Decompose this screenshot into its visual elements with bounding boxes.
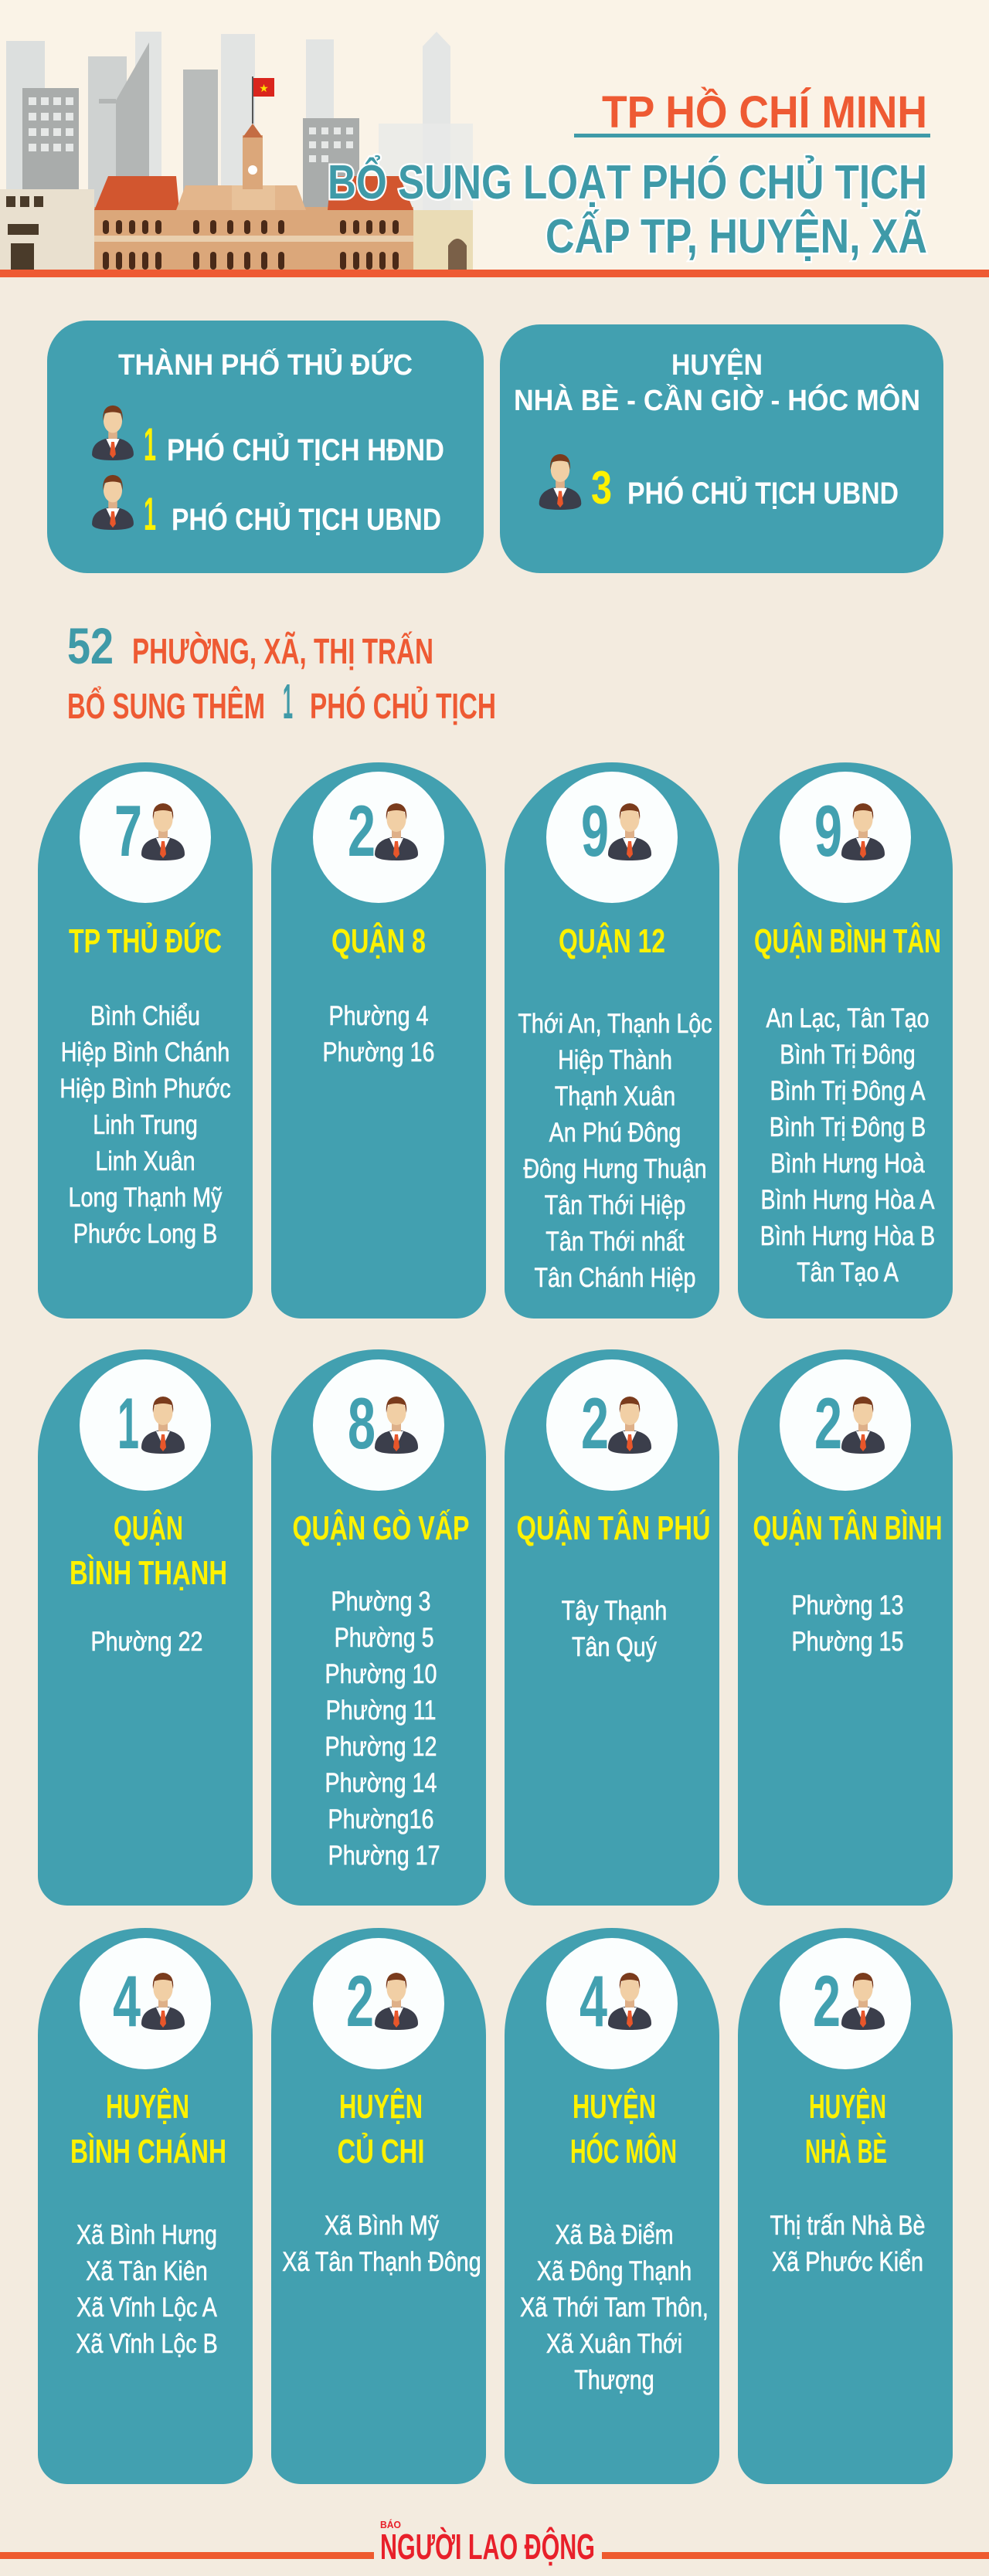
card: Quận Bình Thạnh [38,1349,253,1906]
title: TP HỒ CHÍ MINH [602,87,927,137]
card: Huyện Hóc Môn: Xã Xuân Thới [546,2328,682,2359]
card: Huyện Hóc Môn: 4 [579,1960,607,2041]
panel: Thành phố Thủ Đức: PHÓ CHỦ TỊCH HĐND [167,432,444,467]
card: Huyện Củ Chi: Xã Bình Mỹ [325,2210,439,2241]
cityscape illustration [0,32,473,270]
card: Huyện Bình Chánh: Xã Vĩnh Lộc B [76,2328,218,2359]
card: Quận Bình Tân: Bình Trị Đông A [770,1075,926,1106]
card: Quận Tân Phú [505,1349,719,1906]
subheading: 52 phường, xã, thị trấn: 1 [283,674,293,729]
card: Huyện Nhà Bè: 2 [813,1960,841,2041]
card: Quận Bình Tân: Bình Trị Đông [780,1039,916,1070]
panel: Thành phố Thủ Đức: 1 [144,488,156,540]
card: TP Thủ Đức: TP THỦ ĐỨC [69,921,222,960]
card: TP Thủ Đức: Bình Chiểu [90,1000,200,1031]
cityscape illustration: ★ [259,83,269,95]
subheading: 52 phường, xã, thị trấn: PHƯỜNG, XÃ, THỊ TRẤN [132,631,433,671]
footer logo: Báo Người Lao Động [0,2519,989,2567]
card: Quận Bình Tân: Bình Hưng Hoà [770,1148,925,1179]
card: Huyện Hóc Môn: Xã Đông Thạnh [537,2255,692,2286]
card: TP Thủ Đức: 7 [114,790,142,871]
card: Huyện Nhà Bè: Xã Phước Kiển [772,2246,923,2277]
card: Quận 8: 2 [348,790,376,871]
card: Huyện Nhà Bè: Thị trấn Nhà Bè [770,2210,925,2241]
panel: Huyện Nhà Bè - Cần Giờ - Hóc Môn: HUYỆN [671,348,763,382]
card: TP Thủ Đức: Linh Trung [93,1109,198,1140]
title: CẤP TP, HUYỆN, XÃ [545,210,927,263]
title [328,87,930,263]
panel: Thành phố Thủ Đức: PHÓ CHỦ TỊCH UBND [172,501,441,537]
card: Quận 12: Tân Thới Hiệp [545,1190,685,1220]
card: Quận Gò Vấp: Phường16 [328,1804,433,1834]
card: Quận Tân Phú: 2 [581,1383,609,1464]
subheading: 52 phường, xã, thị trấn: PHÓ CHỦ TỊCH [310,686,496,726]
card: Quận Gò Vấp: Phường 12 [325,1731,437,1762]
card: Huyện Bình Chánh: Xã Vĩnh Lộc A [76,2292,218,2323]
card: Quận Gò Vấp: Phường 17 [328,1840,440,1871]
card: Quận Bình Tân: Bình Hưng Hòa A [761,1184,935,1215]
card: Quận 8: Phường 16 [323,1037,434,1067]
panel: Thành phố Thủ Đức [47,321,484,573]
subheading: 52 phường, xã, thị trấn: BỔ SUNG THÊM [67,686,265,726]
card: Quận 8 [271,762,486,1319]
card: TP Thủ Đức [38,762,253,1319]
card: Huyện Hóc Môn: Xã Bà Điểm [555,2219,674,2250]
card: TP Thủ Đức: Phước Long B [73,1218,217,1249]
card: Huyện Nhà Bè [738,1928,953,2484]
card: Huyện Bình Chánh: Xã Bình Hưng [76,2219,217,2250]
card: Huyện Bình Chánh: HUYỆN [106,2087,189,2126]
card: Quận Tân Bình: 2 [814,1383,842,1464]
card: Huyện Hóc Môn: HÓC MÔN [570,2131,677,2170]
panel: Huyện Nhà Bè - Cần Giờ - Hóc Môn: 3 [591,462,612,514]
card: Huyện Bình Chánh: BÌNH CHÁNH [70,2132,226,2170]
card: TP Thủ Đức: Hiệp Bình Chánh [61,1037,229,1067]
card: Quận 12: Đông Hưng Thuận [523,1153,707,1184]
footer logo: Báo Người Lao Động: NGƯỜI LAO ĐỘNG [380,2527,595,2567]
card: Quận Gò Vấp: QUẬN GÒ VẤP [292,1509,470,1547]
card: Huyện Củ Chi: 2 [346,1960,374,2041]
card: Quận Bình Thạnh: BÌNH THẠNH [70,1553,227,1592]
card: Quận Tân Phú: Tân Quý [572,1631,657,1662]
card: TP Thủ Đức: Linh Xuân [95,1145,195,1176]
card: Huyện Củ Chi: HUYỆN [339,2087,423,2126]
card: Huyện Củ Chi: CỦ CHI [337,2131,425,2170]
card: Huyện Củ Chi [271,1928,486,2484]
card: Quận Tân Phú: Tây Thạnh [562,1595,667,1626]
card: TP Thủ Đức: Long Thạnh Mỹ [69,1182,222,1213]
card: Quận Gò Vấp: Phường 3 [331,1586,430,1617]
card: Quận Gò Vấp: Phường 11 [326,1695,436,1726]
header background [0,0,989,270]
card: Huyện Hóc Môn: Thượng [574,2364,654,2395]
panel: Huyện Nhà Bè - Cần Giờ - Hóc Môn [500,324,943,573]
card: Quận Gò Vấp: Phường 5 [335,1622,434,1653]
card: Quận 12: Thới An, Thạnh Lộc [518,1008,712,1039]
card: Quận Bình Tân [738,762,953,1319]
card: Quận Tân Bình: Phường 15 [792,1626,903,1657]
card: Quận 12: Tân Chánh Hiệp [535,1262,695,1293]
card: Huyện Hóc Môn: Xã Thới Tam Thôn, [520,2292,709,2323]
card: Quận 8: QUẬN 8 [331,921,426,960]
panel: Thành phố Thủ Đức: 1 [144,419,156,470]
card: Huyện Bình Chánh [38,1928,253,2484]
card: Huyện Hóc Môn: HUYỆN [573,2087,656,2126]
subheading: 52 phường, xã, thị trấn [67,617,496,729]
panel: Huyện Nhà Bè - Cần Giờ - Hóc Môn: NHÀ BÈ - CẦN GIỜ - HÓC MÔN [514,382,920,417]
card: Quận Bình Thạnh: Phường 22 [91,1626,202,1657]
panel: Thành phố Thủ Đức: THÀNH PHỐ THỦ ĐỨC [118,347,413,382]
card: Quận Bình Thạnh: QUẬN [114,1509,183,1547]
card: Quận 12: An Phú Đông [549,1117,681,1148]
card: Quận 12: QUẬN 12 [559,921,665,960]
card: Quận Tân Bình [738,1349,953,1906]
card: Quận Bình Tân: 9 [814,790,842,871]
card: Quận 12: Tân Thới nhất [545,1226,685,1257]
card: Huyện Bình Chánh: Xã Tân Kiên [86,2255,208,2286]
card: Quận Gò Vấp: 8 [348,1383,376,1464]
card: Quận 12: Hiệp Thành [558,1044,672,1075]
card: Quận Bình Tân: Bình Hưng Hòa B [760,1220,935,1251]
card: Quận 12: Thạnh Xuân [555,1081,675,1112]
card: Huyện Hóc Môn [505,1928,719,2484]
card: Quận 12: 9 [581,790,609,871]
card: Quận Gò Vấp [271,1349,486,1906]
header orange bar [0,270,989,277]
card: Quận 12 [505,762,719,1319]
panel: Huyện Nhà Bè - Cần Giờ - Hóc Môn: PHÓ CHỦ TỊCH UBND [627,475,899,511]
card: Huyện Củ Chi: Xã Tân Thạnh Đông [282,2246,481,2277]
card: Huyện Bình Chánh: 4 [113,1960,141,2041]
card: Quận Bình Tân: Bình Trị Đông B [770,1112,926,1142]
card: Quận Gò Vấp: Phường 14 [325,1767,437,1798]
card: Quận Bình Tân: An Lạc, Tân Tạo [766,1003,930,1033]
card: Quận Bình Thạnh: 1 [117,1383,139,1464]
card: TP Thủ Đức: Hiệp Bình Phước [59,1073,231,1104]
subheading: 52 phường, xã, thị trấn: 52 [67,617,114,674]
card: Quận Gò Vấp: Phường 10 [325,1658,437,1689]
card: Quận 8: Phường 4 [329,1000,428,1031]
card: Quận Tân Bình: Phường 13 [792,1590,903,1621]
card: Quận Tân Phú: QUẬN TÂN PHÚ [516,1509,711,1547]
card: Huyện Nhà Bè: HUYỆN [809,2087,886,2126]
footer logo: Báo Người Lao Động: BÁO [380,2519,401,2530]
card: Huyện Nhà Bè: NHÀ BÈ [805,2132,887,2170]
card: Quận Bình Tân: Tân Tạo A [797,1257,899,1288]
